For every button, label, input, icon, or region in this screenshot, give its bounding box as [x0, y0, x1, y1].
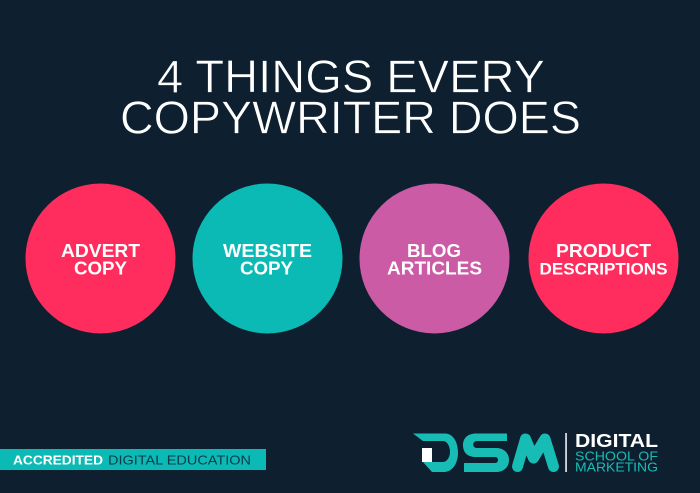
circle: advert copy [26, 184, 176, 334]
banner: accredited digital education: ACCREDITED [13, 452, 103, 468]
title: COPYWRITER DOES [120, 92, 581, 144]
circle: advert copy: ADVERT [61, 241, 140, 261]
logo letter S [463, 434, 509, 472]
logo text: SCHOOL OF [575, 450, 658, 464]
logo white square [422, 448, 432, 462]
circle: blog articles: ARTICLES [387, 258, 482, 278]
title: 4 THINGS EVERY [157, 50, 545, 102]
circle: blog articles: BLOG [407, 241, 461, 261]
logo text: MARKETING [575, 460, 658, 474]
logo letter D [413, 434, 458, 472]
circle: blog articles [360, 184, 510, 334]
circle: product descriptions: PRODUCT [556, 241, 651, 261]
circle: website copy: COPY [240, 258, 293, 278]
logo divider [565, 433, 567, 472]
banner: accredited digital education [0, 449, 266, 470]
circle: product descriptions [528, 184, 678, 334]
banner: accredited digital education: DIGITAL EDUCATION [108, 452, 251, 468]
logo text [575, 430, 658, 474]
circle: advert copy: COPY [74, 258, 127, 278]
circle: website copy [192, 184, 342, 334]
logo text: DIGITAL [575, 430, 658, 451]
logo letter M [518, 439, 554, 466]
circle: product descriptions: DESCRIPTIONS [540, 260, 668, 278]
circle: website copy: WEBSITE [223, 241, 312, 261]
logo: DSM [413, 430, 658, 474]
title [120, 50, 581, 144]
